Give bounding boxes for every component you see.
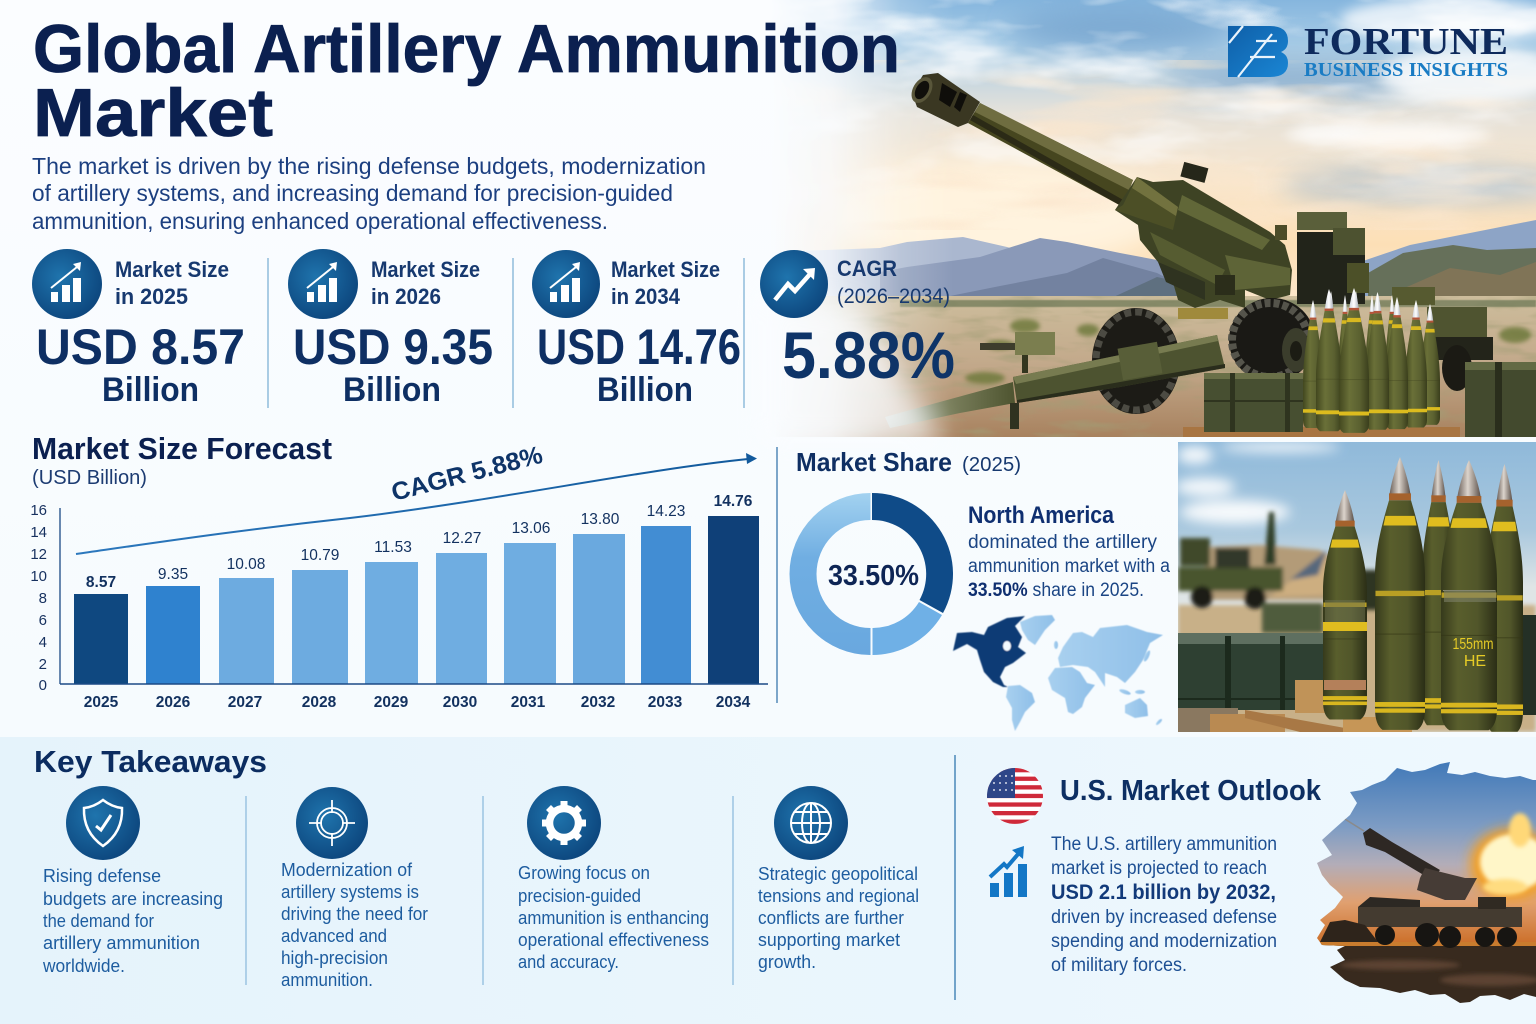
y axis: 0 <box>39 677 47 694</box>
takeaway 4: tensions and regional <box>758 885 919 906</box>
title: Global Artillery Ammunition <box>33 11 900 87</box>
near wheel <box>1228 298 1310 373</box>
bar chart <box>60 516 768 684</box>
takeaway 2: ammunition. <box>281 969 373 990</box>
region text <box>968 502 1170 601</box>
crate <box>1465 362 1536 437</box>
heading: key takeaways: Key Takeaways <box>34 744 267 779</box>
bar values: 12.27 <box>443 530 481 547</box>
year labels: 2026 <box>156 694 191 711</box>
subtitle: of artillery systems, and increasing demand for precision-guided <box>32 180 673 206</box>
year labels: 2029 <box>374 694 409 711</box>
ammunition photo: 155mm <box>1452 636 1494 653</box>
takeaway 3: Growing focus on <box>518 862 650 883</box>
KPI: market size 2025: Market Size <box>115 257 229 282</box>
y axis: 4 <box>39 634 47 651</box>
takeaway 1: budgets are increasing <box>43 888 223 909</box>
ammunition photo: HE <box>1464 653 1486 670</box>
recoil collar <box>1115 177 1178 230</box>
outlook text: market is projected to reach <box>1051 858 1267 879</box>
icon: growth chart <box>532 250 600 318</box>
year labels: 2025 <box>84 694 119 711</box>
KPI: market size 2026: in 2026 <box>371 284 441 309</box>
year labels: 2028 <box>302 694 337 711</box>
year labels: 2033 <box>648 694 683 711</box>
heading: market share: Market Share <box>796 447 952 477</box>
bar values <box>86 493 753 591</box>
takeaway 1: artillery ammunition <box>43 932 200 953</box>
KPI: market size 2026 <box>288 249 493 409</box>
y axis: 6 <box>39 612 47 629</box>
takeaway 2 <box>281 787 428 990</box>
ammunition crates and shells in hero <box>1183 288 1536 437</box>
icon: rising arrow <box>760 250 828 318</box>
outlook text: spending and modernization <box>1051 931 1277 952</box>
bar values: 9.35 <box>158 566 188 583</box>
year labels <box>84 694 751 711</box>
bar values: 10.79 <box>301 547 339 564</box>
firing artillery photo <box>1310 760 1536 1008</box>
year labels: 2032 <box>581 694 615 711</box>
takeaway 4: supporting market <box>758 929 900 950</box>
bar values: 11.53 <box>374 539 412 556</box>
bar values: 10.08 <box>227 556 265 573</box>
crate <box>1204 373 1303 432</box>
y axis: 2 <box>39 656 47 673</box>
fireball <box>1470 813 1536 900</box>
y axis <box>30 502 60 694</box>
takeaway 3: and accuracy. <box>518 951 619 972</box>
KPI: CAGR: 5.88% <box>782 318 955 392</box>
cradle body <box>1115 177 1292 308</box>
takeaway 2: Modernization of <box>281 859 413 880</box>
logo: Fortune Business Insights <box>1228 21 1508 81</box>
takeaway 4: Strategic geopolitical <box>758 863 918 884</box>
year labels: 2034 <box>716 694 751 711</box>
KPI: market size 2034 <box>532 250 741 409</box>
rear sight assembly <box>1275 212 1369 304</box>
icon: crosshair <box>296 787 368 859</box>
takeaway 3: operational effectiveness <box>518 929 709 950</box>
bar values: 14.76 <box>714 493 753 510</box>
logo: Fortune Business Insights: BUSINESS INSIGHTS <box>1304 60 1508 81</box>
outlook text: The U.S. artillery ammunition <box>1051 834 1277 855</box>
takeaway 4: conflicts are further <box>758 907 904 928</box>
logo: Fortune Business Insights: FORTUNE <box>1304 21 1508 63</box>
KPI: CAGR: (2026–2034) <box>837 285 950 308</box>
takeaway 1: the demand for <box>43 910 154 931</box>
donut chart: 33.50% <box>828 560 919 592</box>
takeaway 1: worldwide. <box>42 955 125 976</box>
icon: growth bars <box>990 846 1027 897</box>
icon: gear <box>527 786 601 860</box>
takeaway 2: high-precision <box>281 947 388 968</box>
y axis: 10 <box>30 568 47 585</box>
panel: key takeaways <box>34 744 919 990</box>
howitzer gun <box>885 73 1493 429</box>
KPI: CAGR <box>760 250 955 392</box>
KPI: market size 2034: Billion <box>597 371 693 409</box>
region text: ammunition market with a <box>968 556 1170 577</box>
icon: growth chart <box>32 249 102 319</box>
subtitle <box>32 153 706 234</box>
truck behind <box>1392 287 1493 391</box>
takeaway 1 <box>42 786 223 976</box>
bottom band background <box>0 737 1536 1024</box>
panel: U.S. market outlook <box>987 768 1322 976</box>
KPI: market size 2034: Market Size <box>611 257 720 282</box>
takeaway 4: growth. <box>758 951 816 972</box>
heading: market share: (2025) <box>962 454 1021 476</box>
takeaway 3: ammunition is enthancing <box>518 907 709 928</box>
subtitle: The market is driven by the rising defense budgets, modernization <box>32 153 706 179</box>
year labels: 2031 <box>511 694 546 711</box>
heading: market size forecast: Market Size Forecast <box>32 431 332 466</box>
KPI: market size 2026: USD 9.35 <box>293 319 493 375</box>
CAGR trend arrow: CAGR 5.88% <box>388 441 546 507</box>
far wheel <box>1092 308 1180 414</box>
y axis: 12 <box>30 546 47 563</box>
bar values: 8.57 <box>86 574 116 591</box>
outlook text: USD 2.1 billion by 2032, <box>1051 881 1276 904</box>
shell stack <box>1303 288 1440 433</box>
icon: shield <box>66 786 140 860</box>
panel: market size forecast <box>30 431 768 711</box>
KPI: market size 2025: Billion <box>102 371 199 409</box>
hero photo: howitzer at sunset <box>770 0 1536 437</box>
year labels: 2030 <box>443 694 477 711</box>
KPI: market size 2025: USD 8.57 <box>36 319 245 375</box>
takeaway 2: driving the need for <box>281 903 428 924</box>
unit label: (USD Billion) <box>32 467 147 489</box>
takeaway 2: artillery systems is <box>281 881 419 902</box>
CAGR trend arrow <box>76 441 757 554</box>
KPI: market size 2025: in 2025 <box>115 284 188 309</box>
bar values: 13.06 <box>512 520 550 537</box>
donut chart <box>790 493 953 655</box>
subtitle: ammunition, ensuring enhanced operational effectiveness. <box>32 208 608 234</box>
heading: U.S. market outlook: U.S. Market Outlook <box>1060 775 1322 807</box>
icon: globe <box>774 786 848 860</box>
KPI: market size 2026: Billion <box>343 371 441 409</box>
region text: 33.50% share in 2025. <box>968 580 1144 601</box>
barrel <box>968 103 1133 207</box>
takeaway 3: precision-guided <box>518 885 641 906</box>
KPI: market size 2034: USD 14.76 <box>537 319 741 375</box>
takeaway 1: Rising defense <box>43 865 161 886</box>
KPI: market size 2034: in 2034 <box>611 284 681 309</box>
fade: hero lower left <box>760 290 945 445</box>
icon: US flag <box>987 768 1043 824</box>
ammunition photo <box>1175 442 1536 732</box>
takeaway 4 <box>758 786 919 972</box>
region text: North America <box>968 502 1115 529</box>
outlook text <box>1051 834 1277 976</box>
y axis: 14 <box>30 524 47 541</box>
title <box>33 11 900 151</box>
muzzle brake <box>907 73 980 127</box>
world map <box>953 615 1163 731</box>
region text: dominated the artillery <box>968 532 1157 553</box>
icon: growth chart <box>288 249 358 319</box>
KPI: market size 2026: Market Size <box>371 257 480 282</box>
y axis: 16 <box>30 502 47 519</box>
trail leg <box>885 332 1225 429</box>
panel: market share <box>790 447 1170 731</box>
self-propelled gun <box>1320 816 1522 948</box>
y axis: 8 <box>39 590 47 607</box>
outlook text: driven by increased defense <box>1051 907 1277 928</box>
title: Market <box>33 75 273 151</box>
outlook text: of military forces. <box>1051 955 1187 976</box>
KPI: market size 2025 <box>32 249 245 409</box>
year labels: 2027 <box>228 694 262 711</box>
takeaway 2: advanced and <box>281 925 387 946</box>
bar values: 13.80 <box>581 511 620 528</box>
bar values: 14.23 <box>647 503 685 520</box>
KPI: CAGR: CAGR <box>837 256 897 281</box>
takeaway 3 <box>518 786 709 972</box>
